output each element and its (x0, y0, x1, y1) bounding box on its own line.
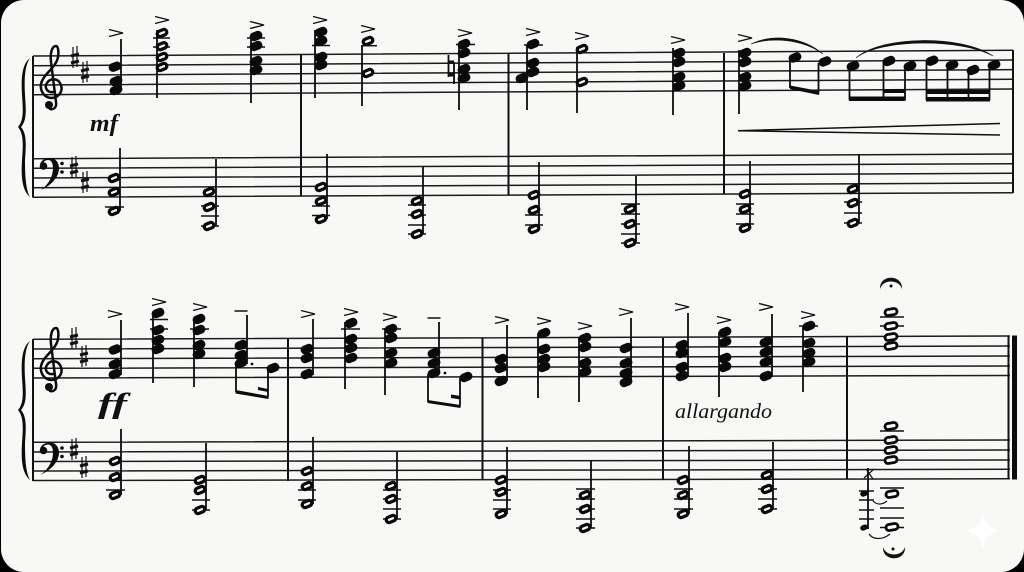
bass clef (40, 442, 64, 474)
treble key signature (70, 327, 88, 367)
tempo: allargando: allargando (675, 399, 772, 423)
bass chord 8 (758, 442, 777, 510)
hairpin crescendo (738, 124, 1000, 135)
bass chord 1 (106, 429, 125, 496)
dynamic: ff: ff (98, 388, 132, 420)
treble staff (33, 50, 1013, 95)
chord 15 (759, 304, 773, 377)
bass chord 2 (192, 443, 210, 511)
chord 3 (190, 304, 209, 387)
chord 7 (520, 28, 543, 110)
bass chord 1 (105, 148, 124, 212)
bass chord 4 (408, 167, 426, 235)
chord 4 (312, 16, 330, 98)
chord 6 with natural (448, 30, 475, 110)
chord 6 (341, 308, 360, 389)
chord 10 (738, 34, 752, 114)
bass chord 7 (736, 161, 754, 229)
treble key signature (71, 46, 89, 83)
final bass chord (880, 426, 904, 460)
bass key signature (70, 156, 89, 193)
bass staff (33, 154, 1013, 197)
chord 5 (361, 26, 377, 106)
chord 12 (619, 308, 633, 383)
chord 11 (578, 322, 592, 402)
beamed eighth notes (790, 57, 827, 95)
chord 9 (495, 316, 509, 382)
chord 1 (108, 310, 122, 375)
lower fermata (883, 547, 905, 558)
bass chord 3 (298, 437, 316, 505)
bass chord 3 (312, 154, 330, 220)
chord 9 (671, 36, 685, 115)
final double bar line (1008, 336, 1017, 480)
chord 8 (575, 32, 589, 113)
chord 14 (717, 316, 731, 397)
bar lines (33, 50, 1013, 198)
chord 2 (153, 16, 170, 98)
bass chord 2 (201, 159, 219, 227)
chord 10 (537, 318, 551, 398)
bass key signature (70, 438, 88, 478)
beamed sixteenth notes (849, 60, 996, 102)
chord 5 (301, 310, 315, 375)
icon: sparkle watermark (965, 512, 1000, 549)
brace (18, 58, 30, 197)
bass chord 5 (493, 447, 511, 515)
chord 2 (150, 298, 168, 383)
chord 3 (247, 22, 265, 103)
bass chord 6 (621, 176, 640, 244)
bass chord 6 (576, 461, 595, 529)
bass staff (33, 440, 1010, 480)
upper fermata (880, 278, 902, 289)
bass clef (40, 158, 64, 190)
chord 8 dotted rhythm (428, 318, 468, 408)
treble staff (33, 336, 1010, 378)
bass chord 8 (844, 155, 862, 224)
treble clef (41, 46, 62, 109)
bass chord 4 (383, 452, 401, 520)
bar lines (33, 336, 847, 481)
dynamic: mf: mf (90, 111, 120, 137)
low octave whole notes (880, 488, 904, 528)
final treble chord (880, 312, 904, 346)
brace (18, 341, 30, 480)
chord 4 dotted rhythm (234, 311, 275, 399)
system 1 (18, 16, 1013, 244)
chord 16 (799, 312, 818, 392)
bass chord 5 (525, 162, 543, 230)
system 2 (18, 278, 1017, 558)
grace notes (859, 468, 890, 538)
bass chord 7 (674, 446, 693, 515)
chord 7 (382, 314, 401, 395)
treble clef (41, 328, 62, 391)
chord 1 (109, 30, 123, 91)
chord 13 (675, 304, 689, 377)
slur 1 (751, 38, 823, 54)
slur 2 (856, 40, 993, 58)
